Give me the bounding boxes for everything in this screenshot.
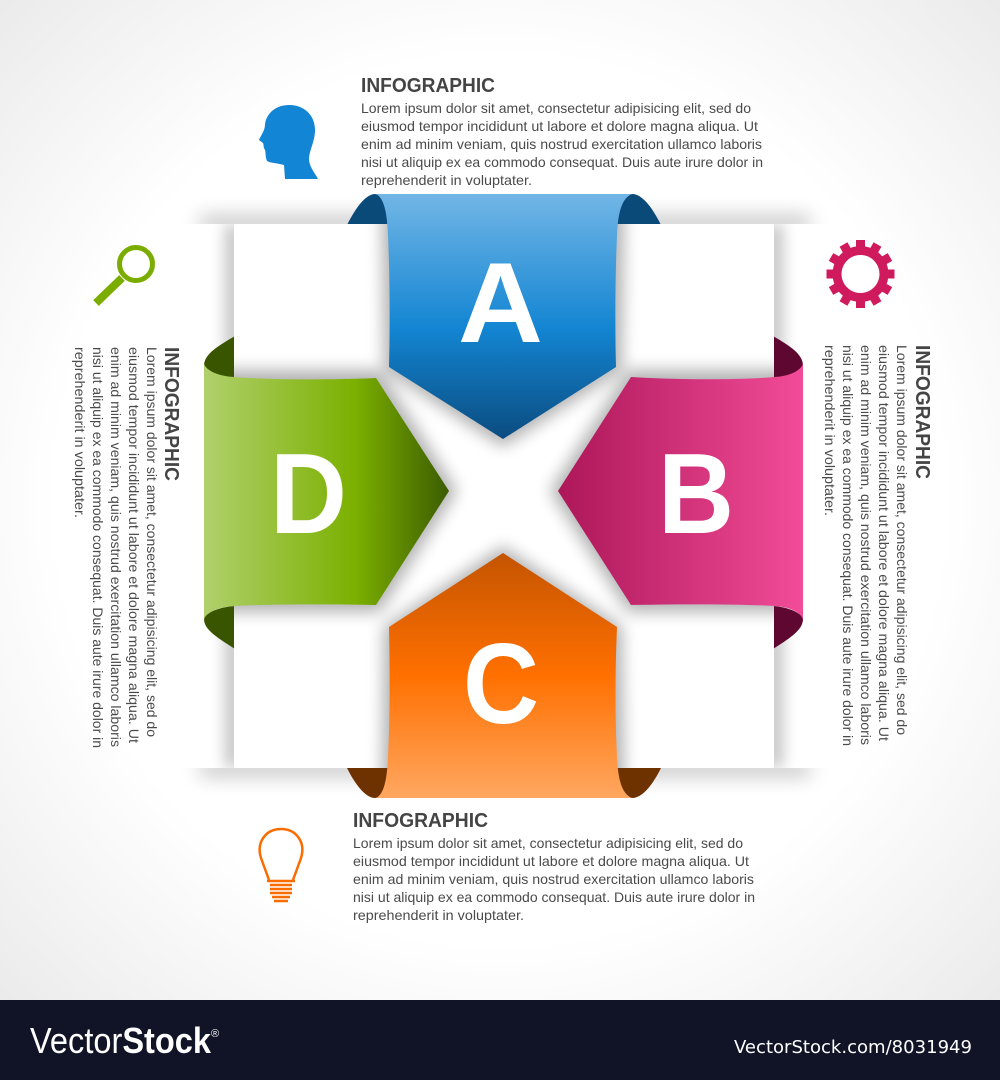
curl C left (347, 768, 389, 798)
body A: eiusmod tempor incididunt ut labore et dolore magna aliqua. Ut (361, 118, 758, 134)
white centre panel (234, 224, 774, 768)
body D: reprehenderit in voluptater. (72, 347, 88, 518)
ribbon C (376, 553, 632, 798)
ribbon shadows on panel (234, 224, 774, 768)
body A (361, 100, 763, 188)
body B: reprehenderit in voluptater. (822, 345, 838, 516)
curl A left (347, 194, 389, 225)
ribbon A (376, 194, 632, 439)
body C: reprehenderit in voluptater. (353, 907, 524, 923)
body D: nisi ut aliquip ex ea commodo consequat. Duis aute irure dolor in (90, 347, 106, 748)
ribbon B (558, 364, 803, 619)
ribbon B body (558, 364, 803, 619)
body D (72, 347, 160, 748)
curl A right (617, 194, 661, 225)
body C: Lorem ipsum dolor sit amet, consectetur adipisicing elit, sed do (353, 835, 743, 851)
body A: reprehenderit in voluptater. (361, 172, 532, 188)
body D: eiusmod tempor incididunt ut labore et dolore magna aliqua. Ut (126, 347, 142, 743)
body B: nisi ut aliquip ex ea commodo consequat. Duis aute irure dolor in (840, 345, 856, 746)
curl D top (204, 336, 235, 378)
text block D (rotated) (72, 347, 182, 748)
body D: enim ad minim veniam, quis nostrud exercitation ullamco laboris (108, 347, 124, 747)
ribbon D body (204, 364, 449, 619)
body B: enim ad minim veniam, quis nostrud exercitation ullamco laboris (858, 345, 874, 745)
letter B: B (658, 431, 734, 558)
ribbon curls behind panel (204, 194, 803, 798)
body A: Lorem ipsum dolor sit amet, consectetur adipisicing elit, sed do (361, 100, 751, 116)
body D: Lorem ipsum dolor sit amet, consectetur adipisicing elit, sed do (144, 347, 160, 737)
paper shadow left (226, 224, 242, 768)
body C: nisi ut aliquip ex ea commodo consequat. Duis aute irure dolor in (353, 889, 755, 905)
letter D: D (270, 431, 347, 558)
text block A (361, 75, 763, 188)
footer bar (0, 1000, 1000, 1080)
heading C: INFOGRAPHIC (353, 810, 488, 832)
text block B (rotated) (822, 345, 933, 746)
paper shadow bottom (200, 760, 810, 776)
icon: light bulb (260, 829, 302, 901)
paper shadow right (766, 224, 782, 768)
letter C: C (463, 621, 539, 748)
body A: enim ad minim veniam, quis nostrud exercitation ullamco laboris (361, 136, 762, 152)
text block C (353, 810, 755, 923)
curl C right (617, 768, 661, 798)
footer image id: VectorStock.com/8031949 (734, 1037, 972, 1058)
curl B bottom (773, 606, 803, 649)
ribbon C body (376, 553, 632, 798)
paper shadow top (200, 216, 810, 232)
curl B top (773, 336, 803, 378)
heading D: INFOGRAPHIC (160, 347, 182, 481)
body C: enim ad minim veniam, quis nostrud exercitation ullamco laboris (353, 871, 754, 887)
curl D bottom (204, 606, 235, 649)
body C: eiusmod tempor incididunt ut labore et dolore magna aliqua. Ut (353, 853, 749, 869)
registered mark: ® (211, 1028, 219, 1040)
heading A: INFOGRAPHIC (361, 75, 495, 97)
heading B: INFOGRAPHIC (911, 345, 933, 479)
icon: gear (826, 240, 894, 308)
body B (822, 345, 910, 746)
icon: head (259, 105, 318, 179)
body A: nisi ut aliquip ex ea commodo consequat. Duis aute irure dolor in (361, 154, 763, 170)
body B: eiusmod tempor incididunt ut labore et dolore magna aliqua. Ut (876, 345, 892, 741)
body C (353, 835, 755, 923)
icon: magnifier (96, 248, 152, 303)
body B: Lorem ipsum dolor sit amet, consectetur adipisicing elit, sed do (894, 345, 910, 735)
footer logo: VectorStock (30, 1020, 212, 1061)
letter A: A (458, 240, 543, 367)
ribbon D (204, 364, 449, 619)
ribbon A body (376, 194, 632, 439)
